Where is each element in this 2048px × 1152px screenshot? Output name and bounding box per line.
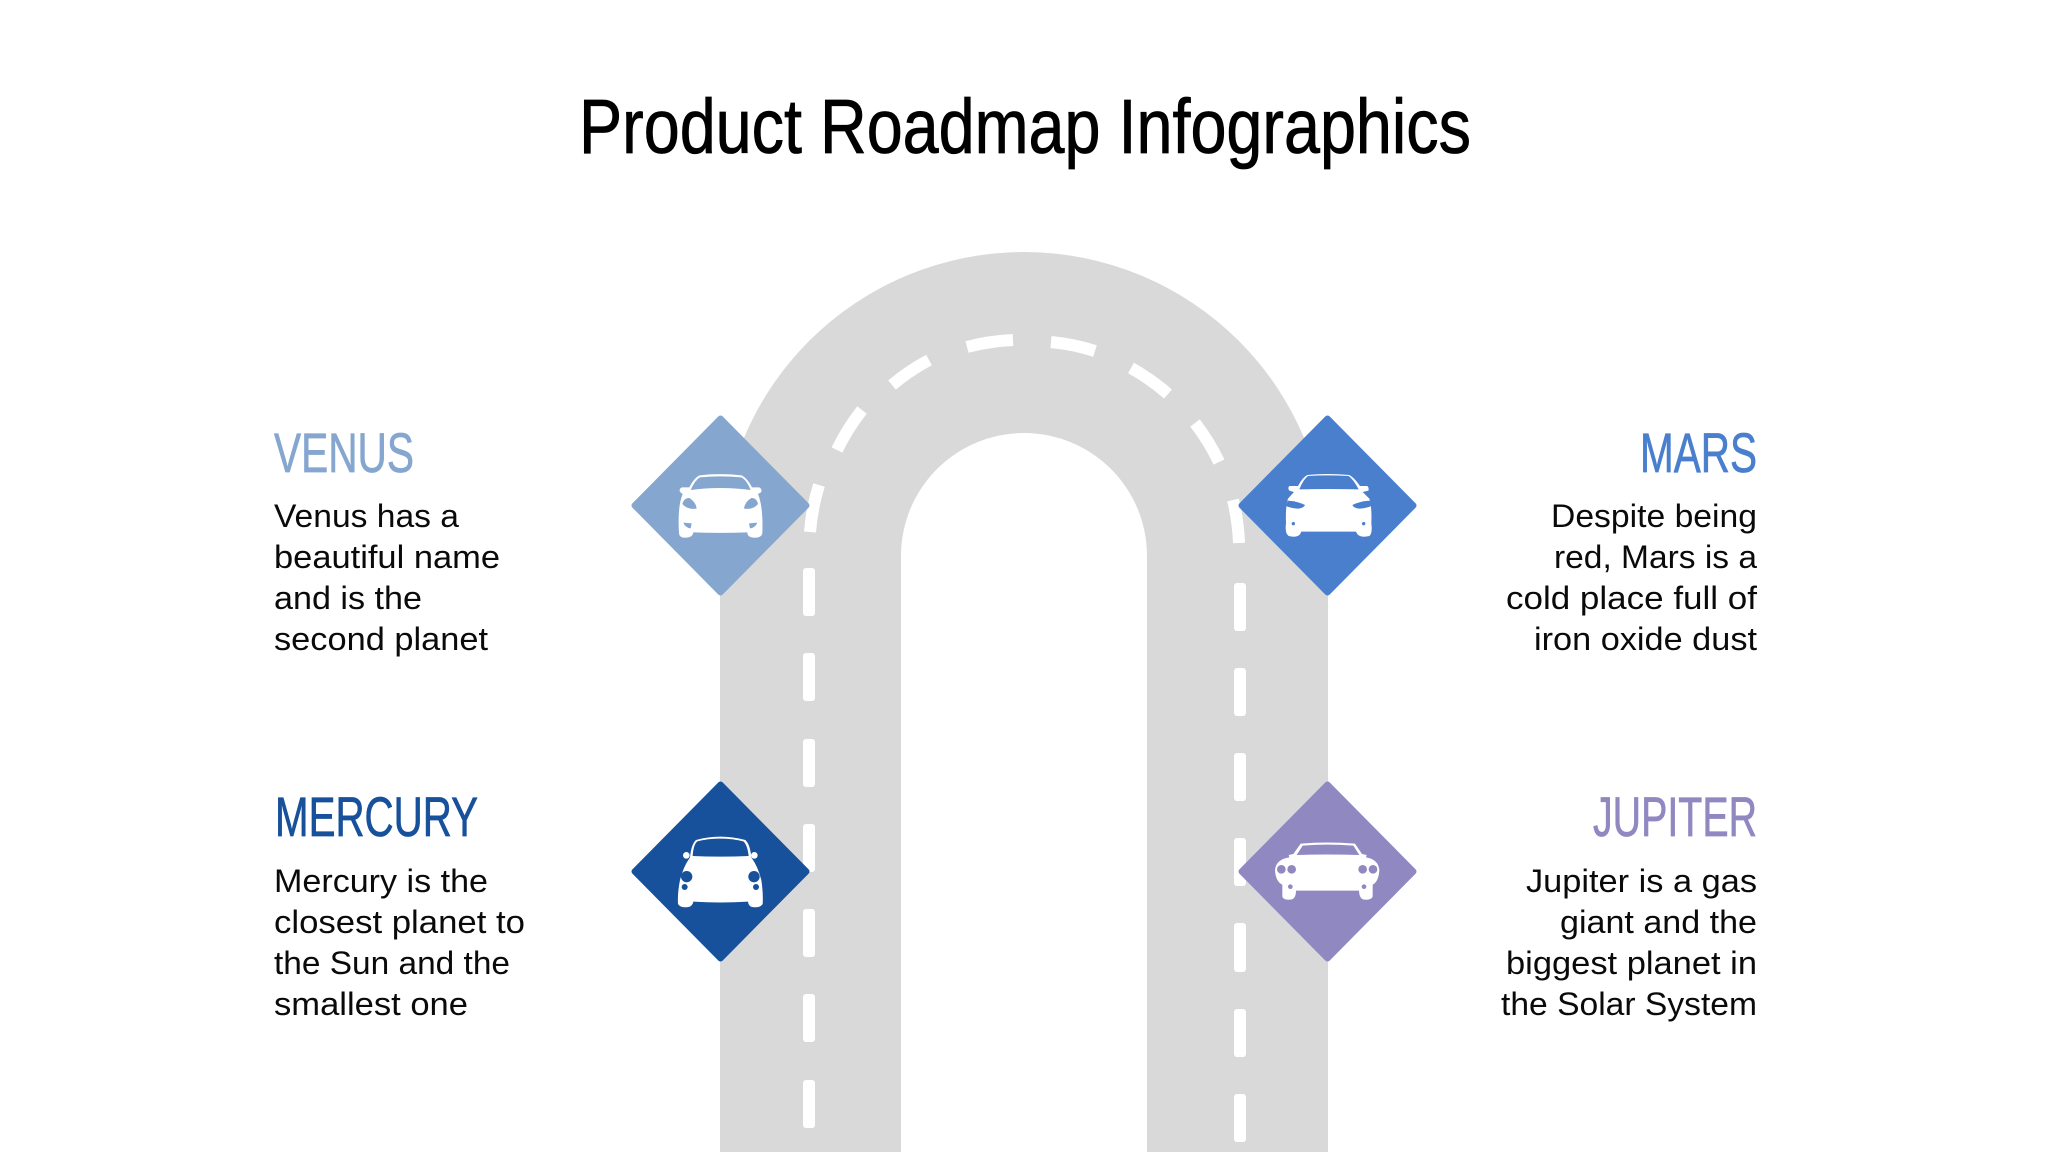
text block: venus: second planet [274,621,488,657]
icon: mars car sign [1242,418,1414,592]
text block: venus: and is the [274,580,422,616]
heading: venus: VENUS [274,421,414,484]
text block: venus: Venus has a [274,498,460,534]
text block: mercury: Mercury is the [274,863,488,899]
text block: jupiter: Jupiter is a gas [1526,863,1757,899]
heading: mars: MARS [1640,421,1757,484]
panel: venus [274,418,806,657]
icon: venus car sign [634,418,806,592]
panel: mars [1242,418,1758,657]
heading: mercury: MERCURY [275,785,478,848]
icon: jupiter car sign [1242,784,1414,958]
text block: mars [1506,498,1758,657]
panel: jupiter [1242,784,1757,1022]
text block: mercury [274,863,525,1022]
road [720,252,1328,1152]
text block: mercury: the Sun and the [274,945,510,981]
panel: mercury [274,784,806,1022]
text block: mars: red, Mars is a [1554,539,1758,575]
text block: mars: Despite being [1551,498,1757,534]
text block: mercury: smallest one [274,986,468,1022]
text block: jupiter: the Solar System [1501,986,1757,1022]
heading: jupiter: JUPITER [1593,785,1757,848]
text block: jupiter: biggest planet in [1506,945,1757,981]
text block: mars: iron oxide dust [1534,621,1757,657]
title: Product Roadmap Infographics [579,84,1471,170]
text block: jupiter [1501,863,1757,1022]
icon: mercury car sign [634,784,806,958]
text block: venus [274,498,500,657]
text block: mars: cold place full of [1506,580,1758,616]
text block: mercury: closest planet to [274,904,525,940]
text block: venus: beautiful name [274,539,500,575]
text block: jupiter: giant and the [1560,904,1757,940]
